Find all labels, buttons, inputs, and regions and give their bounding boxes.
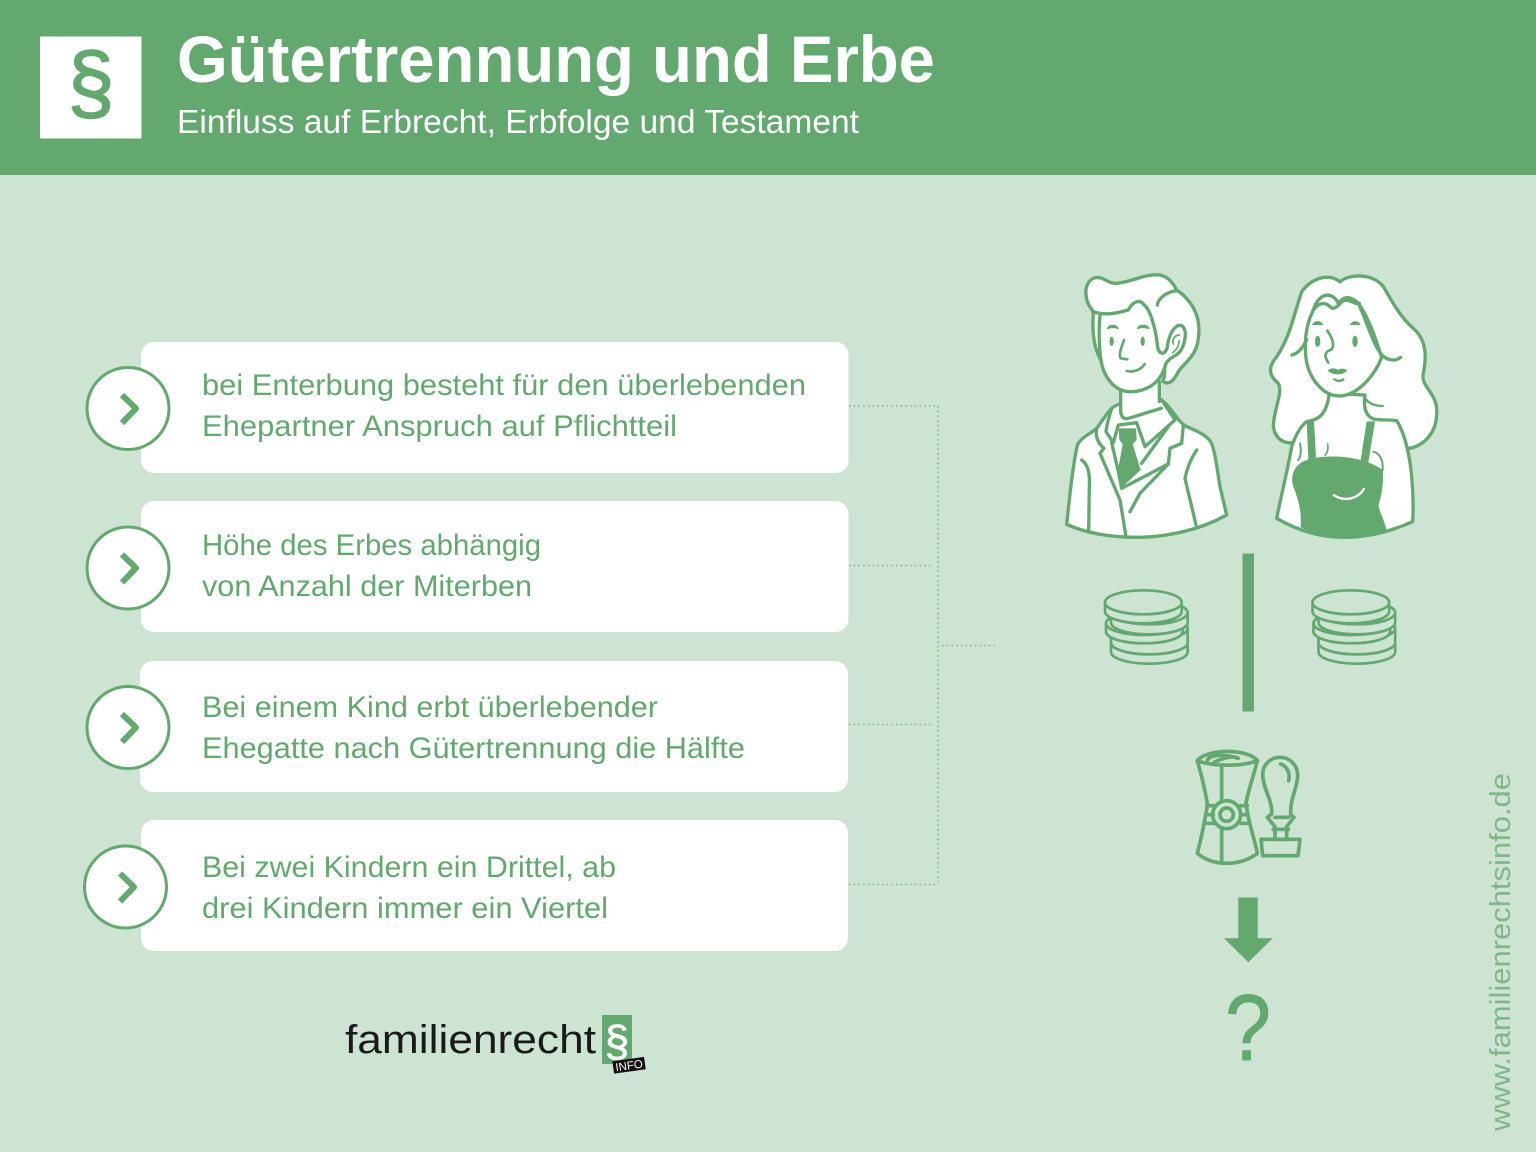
hair [1270,276,1437,448]
text: card 4: drei Kindern immer ein Viertel [202,892,608,925]
body [1277,393,1413,537]
icon: chevron circle 3 [87,686,169,768]
text: card 2: von Anzahl der Miterben [202,570,532,603]
panel: card 4 [84,820,848,951]
face [1100,304,1182,392]
panel: card 2 [87,501,848,632]
features [1313,322,1323,325]
text: card 1 [202,369,806,443]
hair fill [1086,275,1199,383]
face [1305,295,1382,396]
arrow: down [1224,898,1273,962]
tie [1118,428,1141,487]
dress [1292,457,1387,537]
website url: www.familienrechtsinfo.de [1485,773,1517,1132]
icon: question mark: ? [1225,975,1271,1080]
logo: familienrecht.info: familienrecht [345,1018,596,1062]
icon: divider bar [1242,554,1254,712]
neck [1121,383,1162,420]
icon: coins right [1312,590,1395,664]
scroll [1197,751,1257,863]
hair outline [1086,275,1199,383]
icon: paragraph sign [40,35,142,138]
connector: dotted bracket [849,406,995,885]
subtitle: Einfluss auf Erbrecht, Erbfolge und Testament [177,103,859,140]
text: card 1: bei Enterbung besteht für den überlebenden [202,369,806,402]
logo: familienrecht.info [345,1015,646,1075]
neck shading [1365,398,1383,406]
logo: familienrecht.info: § [605,1017,629,1066]
icon: chevron circle 2 [87,527,169,609]
icon: chevron circle 1 [87,368,169,450]
header banner [0,0,1536,175]
stamp [1263,757,1298,839]
straps [1307,421,1316,460]
icon: chevron circle 4 [84,846,166,928]
text: card 3: Bei einem Kind erbt überlebender [202,691,658,724]
text: card 2 [202,529,541,603]
text: card 3: Ehegatte nach Gütertrennung die Hälfte [202,732,745,765]
features [1107,325,1118,329]
text: card 2: Höhe des Erbes abhängig [202,529,541,562]
panel: card 3 [87,661,848,792]
icon: paragraph sign: § [68,35,114,129]
logo: familienrecht.info: INFO [615,1059,644,1074]
jacket [1067,400,1227,537]
text: card 4 [202,851,616,925]
icon: woman portrait [1270,276,1437,537]
text: card 3 [202,691,745,765]
icon: coins left [1105,590,1188,664]
text: card 1: Ehepartner Anspruch auf Pflichtteil [202,410,677,443]
icon: testament scroll and stamp [1197,751,1300,863]
panel: card 1 [87,342,848,473]
title: Gütertrennung und Erbe [177,22,935,96]
icon: man portrait [1067,275,1227,537]
text: card 4: Bei zwei Kindern ein Drittel, ab [202,851,616,884]
